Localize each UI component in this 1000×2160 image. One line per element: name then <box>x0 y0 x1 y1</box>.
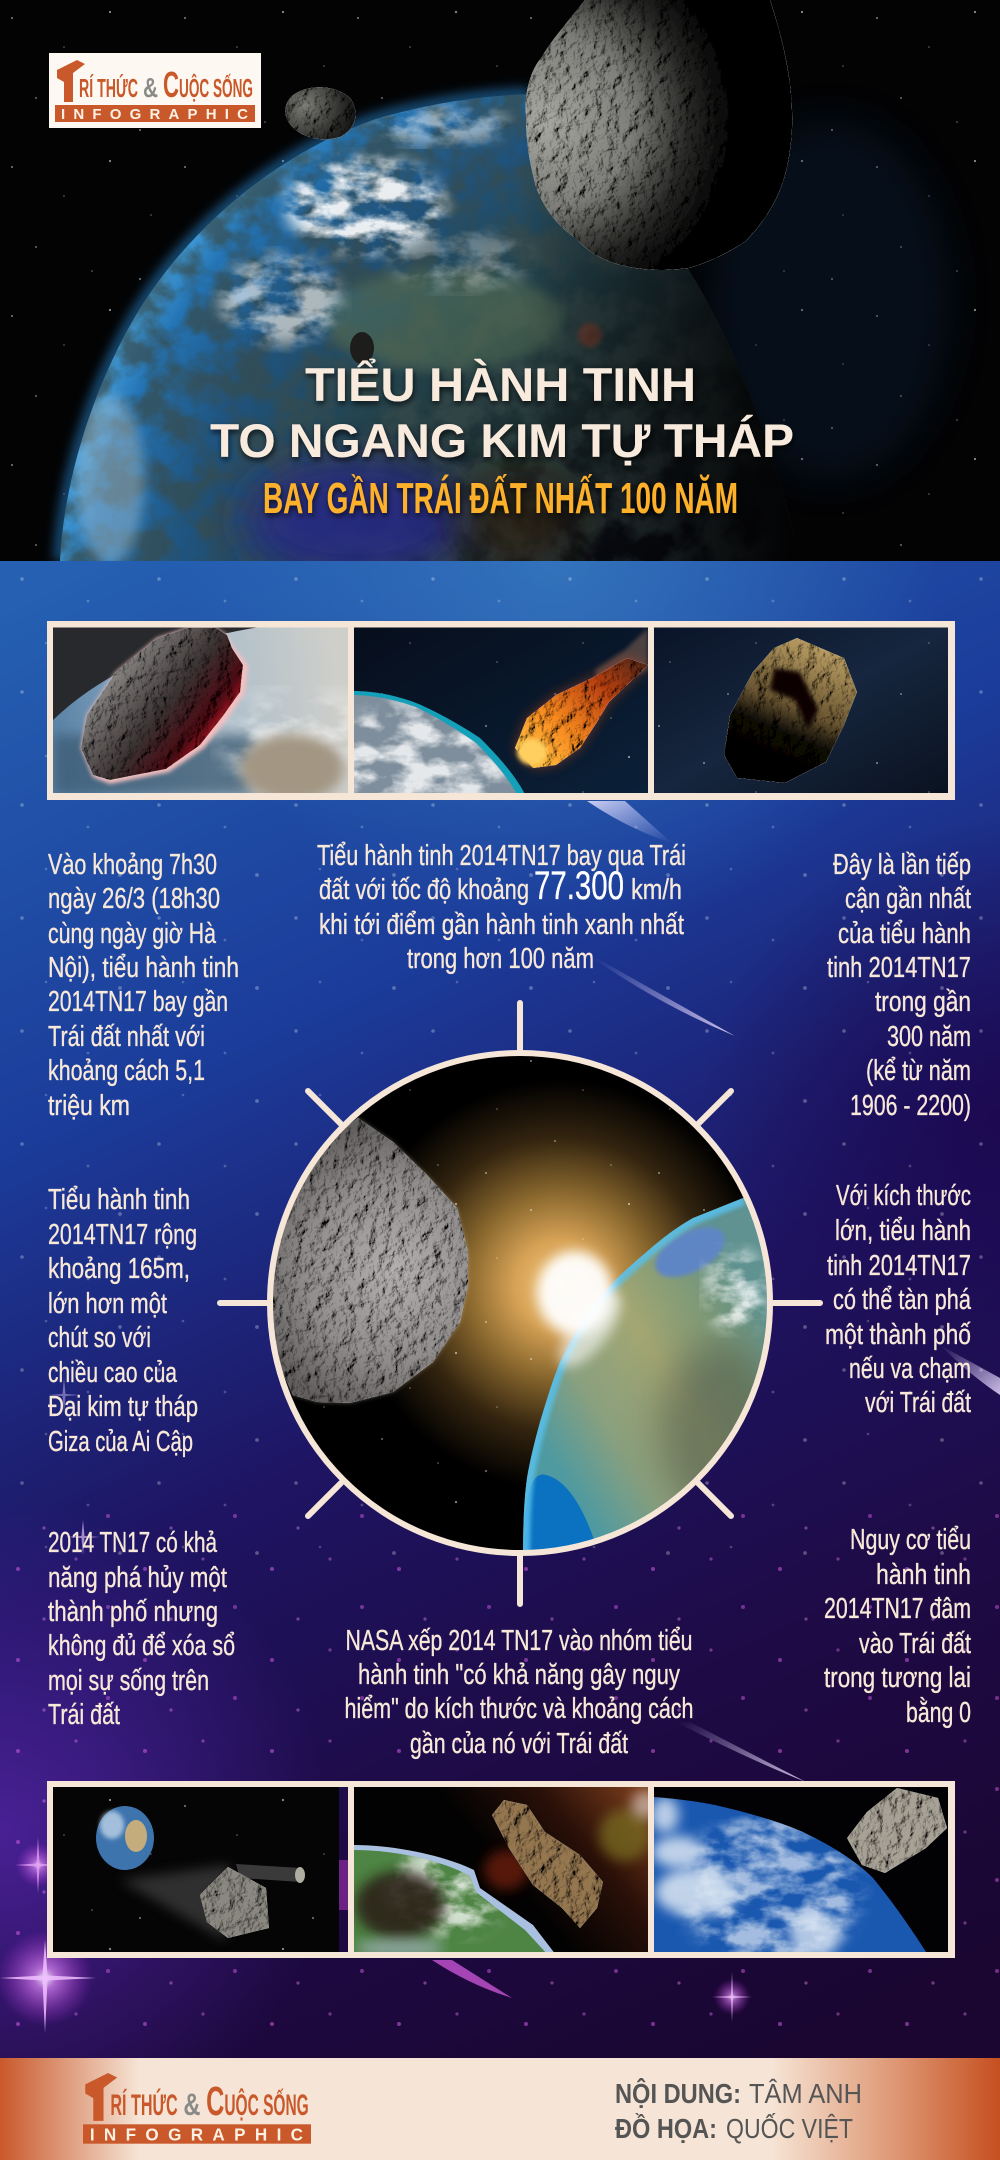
photo: asteroid above blue Earth <box>651 1787 948 1965</box>
credits: ĐỒ HỌA: <box>615 2113 717 2144</box>
speed figure: 77.300 <box>534 864 624 908</box>
text: left middle: lớn hơn một <box>48 1288 167 1320</box>
title <box>210 358 794 523</box>
text: left middle: chút so với <box>48 1322 151 1354</box>
logo: Tri Thuc & Cuoc Song Infographic <box>49 53 261 128</box>
text: left bottom: 2014 TN17 có khả <box>48 1527 218 1559</box>
text: center bottom: hành tinh "có khả năng gây nguy <box>358 1659 680 1691</box>
text: left top: ngày 26/3 (18h30 <box>48 883 220 915</box>
text: left top: triệu km <box>48 1090 130 1122</box>
text: center bottom: hiểm" do kích thước và khoảng cách <box>344 1693 694 1725</box>
text: right top <box>827 849 971 1122</box>
text: left bottom: thành phố nhưng <box>48 1596 218 1628</box>
text: left top: khoảng cách 5,1 <box>48 1055 205 1087</box>
text: right top: 300 năm <box>887 1021 971 1053</box>
text: left top: Trái đất nhất với <box>48 1021 205 1053</box>
asteroid <box>262 1118 468 1403</box>
footer logo <box>83 2073 311 2144</box>
text: center bottom: NASA xếp 2014 TN17 vào nhóm tiểu <box>346 1625 692 1657</box>
text: left top: Vào khoảng 7h30 <box>48 849 217 881</box>
text: left top: cùng ngày giờ Hà <box>48 918 217 950</box>
Earth limb <box>523 1198 767 1550</box>
big asteroid <box>526 0 792 270</box>
text: right top: trong gần <box>875 986 971 1018</box>
photo strip: bottom <box>47 1781 955 1965</box>
text: center top: trong hơn 100 năm <box>407 943 594 975</box>
photo: asteroid above Earth with red glow <box>53 628 348 793</box>
text: center top: đất với tốc độ khoảng <box>319 874 529 906</box>
text: left middle <box>48 1184 198 1458</box>
subtitle: BAY GẦN TRÁI ĐẤT NHẤT 100 NĂM <box>263 473 738 523</box>
footer band <box>0 2058 1000 2160</box>
photo: burning meteor approaching Earth <box>354 628 648 793</box>
text: left bottom: Trái đất <box>48 1699 120 1731</box>
logo: Tri Thuc & Cuoc Song Infographic: UỘC SỐNG <box>179 73 253 103</box>
text: left top <box>48 849 239 1122</box>
text: center top: Tiểu hành tinh 2014TN17 bay qua Trái <box>317 840 686 872</box>
text: left bottom <box>48 1527 235 1731</box>
logo: Tri Thuc & Cuoc Song Infographic: C <box>163 64 179 105</box>
text: left middle: 2014TN17 rộng <box>48 1219 197 1251</box>
distant asteroid speck <box>350 332 374 364</box>
text: right bottom: hành tinh <box>876 1559 971 1591</box>
photo: asteroid with Earth behind <box>53 1787 339 1952</box>
credits: QUỐC VIỆT <box>726 2112 853 2144</box>
text: center bottom: gần của nó với Trái đất <box>410 1728 628 1760</box>
Earth <box>60 94 794 561</box>
logo: Tri Thuc & Cuoc Song Infographic: INFOGRAPHIC <box>61 106 248 123</box>
text: left middle: Tiểu hành tinh <box>48 1184 190 1216</box>
text: center bottom <box>344 1625 694 1760</box>
credits: NỘI DUNG: <box>615 2077 741 2109</box>
text: right bottom: bằng 0 <box>906 1696 971 1729</box>
credits: TÂM ANH <box>749 2078 862 2109</box>
text: left middle: Giza của Ai Cập <box>48 1426 193 1458</box>
main space background <box>0 561 1000 2058</box>
text: left middle: chiều cao của <box>48 1357 178 1389</box>
central circle illustration with radiating ticks <box>220 1003 820 1604</box>
small asteroid <box>285 87 356 139</box>
title line 2: TO NGANG KIM TỰ THÁP <box>210 414 794 467</box>
footer logo: UỘC SỐNG <box>224 2088 309 2122</box>
radiating ticks <box>220 1003 820 1604</box>
text: center top: km/h <box>631 874 682 906</box>
credits <box>615 2077 862 2144</box>
header: space background with Earth and asteroids <box>0 0 1000 580</box>
text: center top: khi tới điểm gần hành tinh xanh nhất <box>319 909 684 941</box>
text: left middle: khoảng 165m, <box>48 1253 190 1285</box>
photo strip: top <box>47 621 955 800</box>
photo: golden asteroid in deep space <box>654 627 948 793</box>
text: center top <box>317 840 686 975</box>
circle ring <box>270 1053 770 1553</box>
text: right middle <box>825 1180 972 1419</box>
logo: Tri Thuc & Cuoc Song Infographic: & <box>143 72 158 103</box>
title line 1: TIỂU HÀNH TINH <box>305 358 696 411</box>
text: left bottom: năng phá hủy một <box>48 1562 227 1594</box>
text: left top: Nội), tiểu hành tinh <box>48 952 239 984</box>
circle scene <box>262 1051 780 1560</box>
text: left bottom: không đủ để xóa sổ <box>48 1630 235 1662</box>
text: right bottom <box>824 1524 971 1729</box>
footer logo: INFOGRAPHIC <box>90 2125 303 2144</box>
text: left bottom: mọi sự sống trên <box>48 1665 209 1697</box>
footer logo: C <box>206 2078 224 2124</box>
text: left top: 2014TN17 bay gần <box>48 986 228 1018</box>
logo: Tri Thuc & Cuoc Song Infographic: RÍ THỨC <box>79 73 138 103</box>
footer logo: & <box>183 2086 200 2122</box>
footer logo: RÍ THỨC <box>110 2088 178 2122</box>
text: left middle: Đại kim tự tháp <box>48 1391 198 1423</box>
photo: asteroid over green Earth <box>354 1787 659 1958</box>
